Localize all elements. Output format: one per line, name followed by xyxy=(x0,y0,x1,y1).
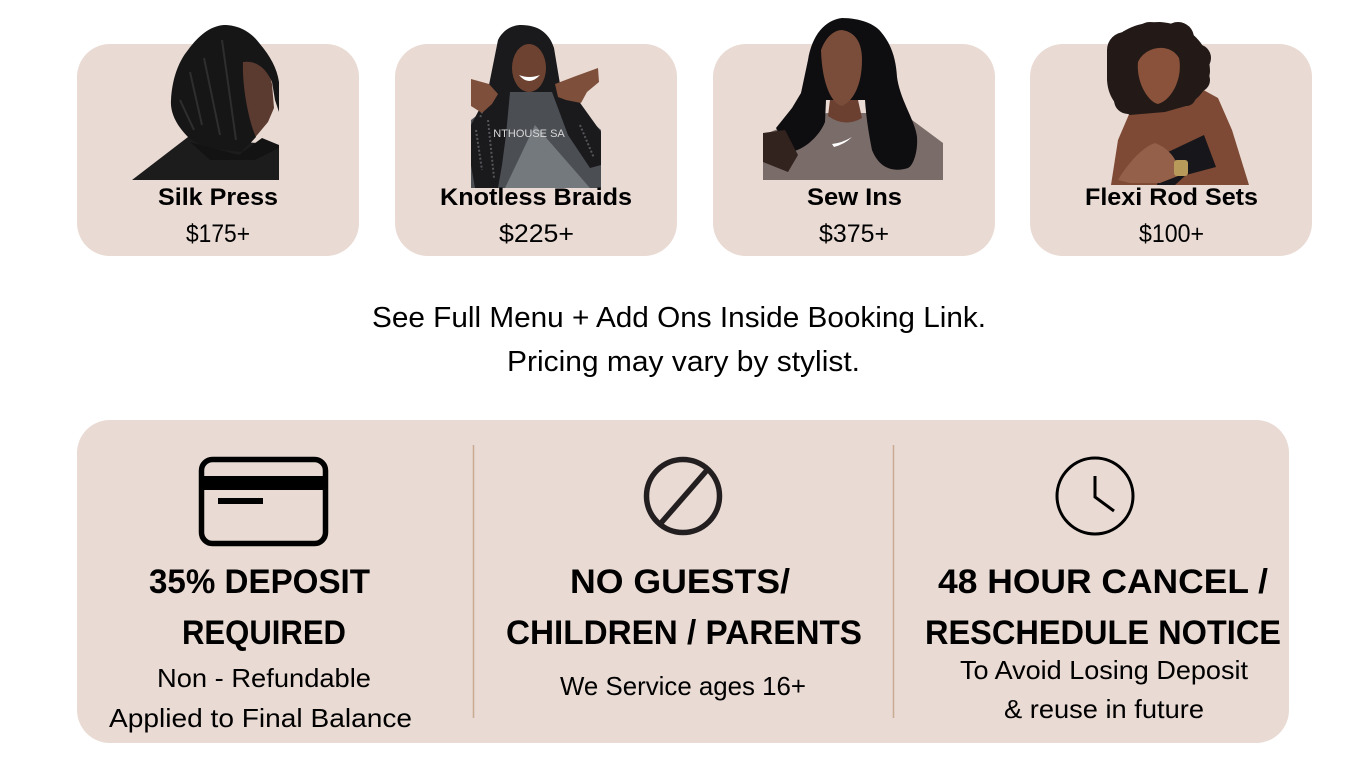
panel: knotless braids card xyxy=(395,25,677,256)
price: silk press: $175+ xyxy=(186,220,250,248)
heading: deposit xyxy=(149,563,370,652)
heading: no guests: CHILDREN / PARENTS xyxy=(506,614,862,652)
price: flexi rod sets: $100+ xyxy=(1139,220,1204,248)
panel: silk press card xyxy=(77,25,359,256)
photo: knotless braids xyxy=(471,25,601,188)
text block: menu note: Pricing may vary by stylist. xyxy=(507,346,860,378)
label: flexi rod sets: Flexi Rod Sets xyxy=(1085,184,1258,211)
text: deposit details xyxy=(109,663,412,733)
text: deposit details: Applied to Final Balance xyxy=(109,703,412,733)
panel: sew ins card xyxy=(713,18,995,256)
text: age policy: We Service ages 16+ xyxy=(560,671,806,701)
photo: flexi rod curls xyxy=(1107,22,1249,185)
photo: silk press bob xyxy=(132,25,279,180)
text: cancellation details: To Avoid Losing Deposit xyxy=(960,655,1249,685)
heading: deposit: 35% DEPOSIT xyxy=(149,563,370,601)
panel: flexi rod sets card xyxy=(1030,22,1312,256)
panel: booking policies xyxy=(77,420,1289,743)
icon: prohibited sign xyxy=(646,460,720,532)
label: sew ins: Sew Ins xyxy=(807,184,902,211)
heading: cancellation: RESCHEDULE NOTICE xyxy=(925,614,1281,652)
icon: credit card xyxy=(200,460,327,544)
text block: menu note: See Full Menu + Add Ons Inside Booking Link. xyxy=(372,302,986,334)
heading: no guests xyxy=(506,563,862,652)
text: cancellation details: & reuse in future xyxy=(1004,694,1204,724)
heading: deposit: REQUIRED xyxy=(182,614,346,652)
label: silk press: Silk Press xyxy=(158,184,278,211)
text: deposit details: Non - Refundable xyxy=(157,663,371,693)
photo: sew ins xyxy=(763,18,943,180)
price: sew ins: $375+ xyxy=(819,220,889,248)
label: knotless braids: Knotless Braids xyxy=(440,184,632,211)
heading: cancellation xyxy=(925,563,1281,652)
photo: knotless braids: NTHOUSE SA xyxy=(493,128,565,140)
heading: no guests: NO GUESTS/ xyxy=(570,563,791,601)
icon: clock xyxy=(1057,458,1133,534)
price: knotless braids: $225+ xyxy=(499,220,574,248)
text: cancellation details xyxy=(960,655,1249,724)
text block: menu note xyxy=(372,302,986,378)
heading: cancellation: 48 HOUR CANCEL / xyxy=(938,563,1269,601)
